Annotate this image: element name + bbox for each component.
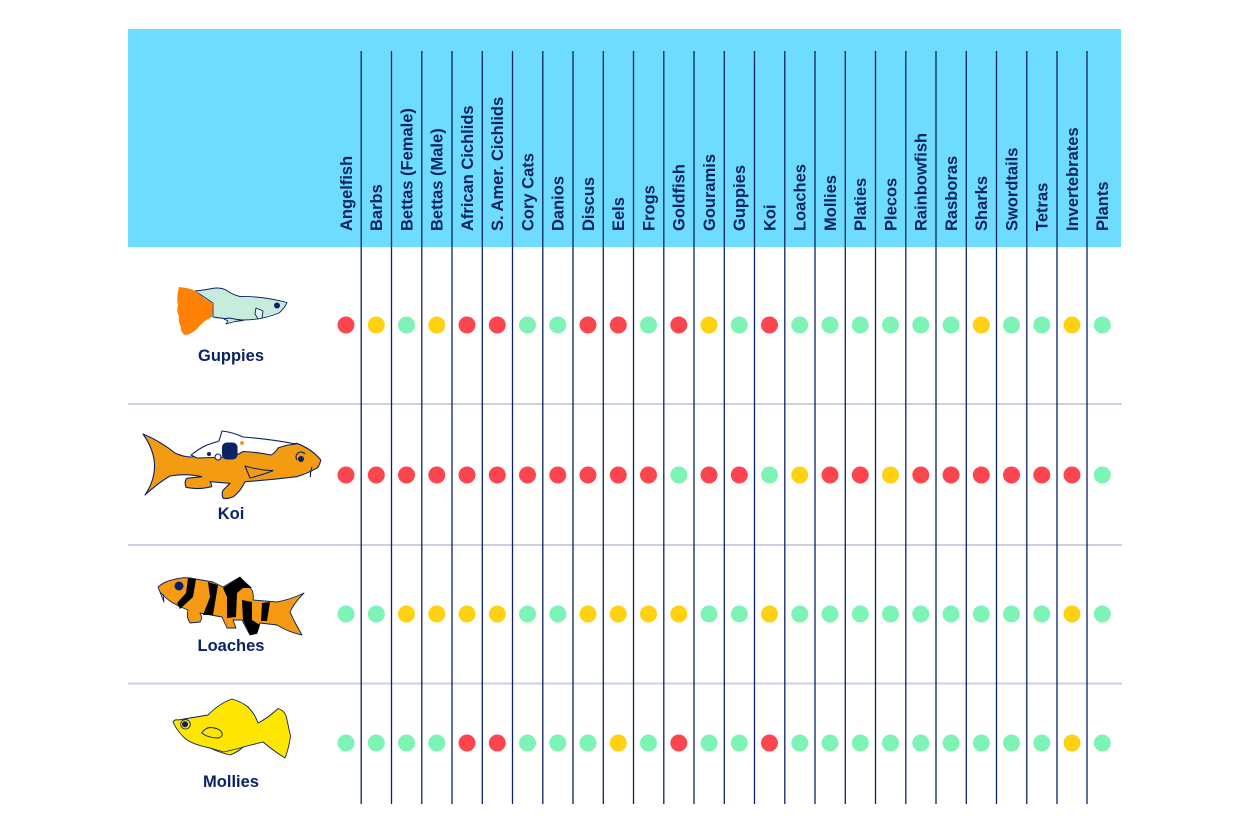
column headings: Goldfish bbox=[670, 164, 688, 231]
column headings: Eels bbox=[610, 197, 628, 231]
label: Guppies: Guppies bbox=[198, 347, 264, 365]
column headings: Discus bbox=[580, 177, 598, 231]
compatibility dots: Koi row bbox=[338, 466, 1111, 484]
icon: molly bbox=[173, 699, 290, 758]
compatibility dots: Loaches row bbox=[338, 606, 1111, 622]
label: Mollies: Mollies bbox=[203, 773, 259, 791]
column headings: Loaches bbox=[792, 164, 810, 231]
column headings: Platies bbox=[852, 178, 870, 231]
column headings: African Cichlids bbox=[459, 105, 477, 231]
column headings: Plants bbox=[1094, 181, 1112, 231]
column headings: Rasboras bbox=[943, 156, 961, 231]
label: Loaches: Loaches bbox=[198, 637, 264, 655]
header band bbox=[128, 29, 1121, 247]
column headings: S. Amer. Cichlids bbox=[489, 97, 507, 231]
column headings: Gouramis bbox=[701, 154, 719, 231]
column lines bbox=[361, 51, 1087, 804]
column headings: Invertebrates bbox=[1064, 127, 1082, 231]
column headings: Rainbowfish bbox=[912, 133, 930, 231]
column headings: Bettas (Male) bbox=[428, 128, 446, 231]
column headings: Cory Cats bbox=[519, 153, 537, 231]
column headings: Barbs bbox=[368, 184, 386, 231]
column headings: Tetras bbox=[1034, 183, 1052, 231]
compatibility dots: Guppies row bbox=[338, 316, 1111, 334]
column headings: Bettas (Female) bbox=[398, 108, 416, 231]
column headings bbox=[338, 97, 1112, 231]
compatibility dots: Mollies row bbox=[338, 734, 1111, 752]
icon: loach bbox=[158, 577, 304, 635]
column headings: Guppies bbox=[731, 165, 749, 231]
column headings: Frogs bbox=[640, 185, 658, 231]
column headings: Plecos bbox=[882, 178, 900, 231]
icon: koi bbox=[143, 431, 321, 498]
icon: guppy bbox=[177, 287, 287, 335]
column headings: Koi bbox=[761, 204, 779, 231]
column headings: Danios bbox=[550, 176, 568, 231]
column headings: Swordtails bbox=[1003, 148, 1021, 231]
label: Koi: Koi bbox=[218, 505, 244, 523]
column headings: Angelfish bbox=[338, 156, 356, 231]
column headings: Mollies bbox=[822, 175, 840, 231]
column headings: Sharks bbox=[973, 176, 991, 231]
row dividers bbox=[128, 404, 1122, 684]
